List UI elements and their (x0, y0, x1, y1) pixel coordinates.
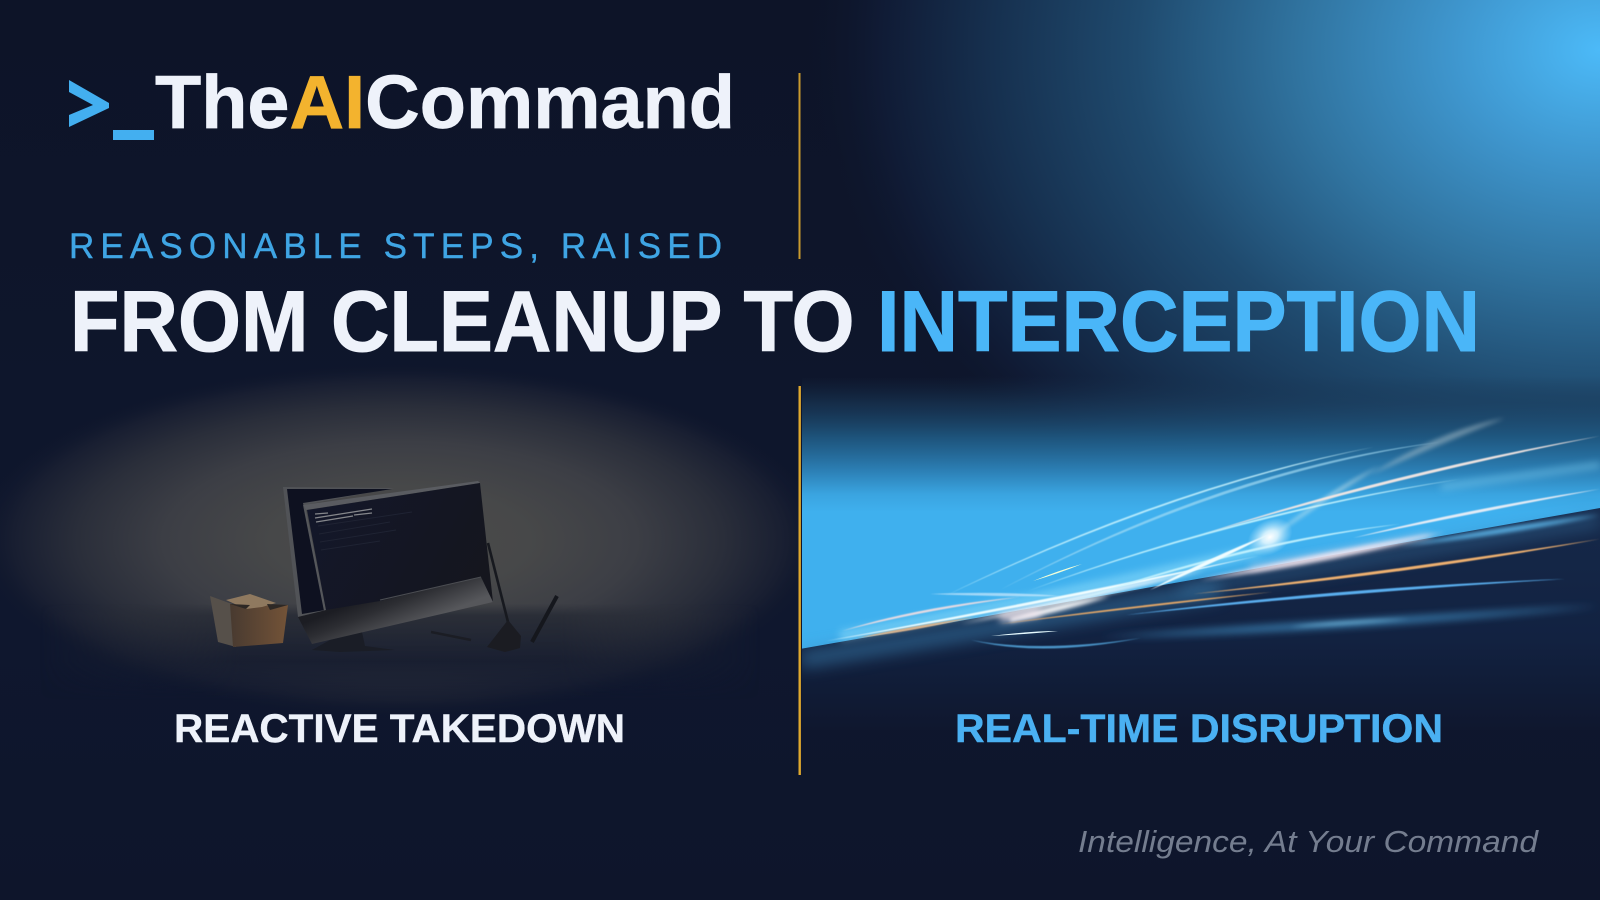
front monitor top bezel (303, 481, 480, 510)
rear monitor frame (283, 487, 394, 617)
monitor stand (312, 632, 395, 652)
crossing streak (1150, 534, 1270, 590)
wide pale streak along edge (1200, 532, 1445, 580)
panel: real-time disruption light streak (802, 386, 1600, 694)
main headline: FROM CLEANUP TO INTERCEPTION (70, 274, 1480, 370)
icon: paper waste bin (210, 594, 288, 647)
icon: terminal prompt (69, 80, 154, 140)
star flare (1248, 519, 1292, 555)
light streaks (826, 418, 1600, 649)
grey spotlight backdrop (0, 360, 800, 720)
sky blue field (802, 372, 1600, 660)
label: real-time disruption: REAL-TIME DISRUPTION (955, 707, 1443, 751)
top-right light glow (800, 0, 1600, 660)
soft blue glow under wedge edge (800, 590, 1220, 660)
logo (69, 60, 735, 144)
brand wordmark: TheAICommand (155, 60, 735, 144)
pale pink upper streak (1203, 436, 1600, 534)
orange streaks (1193, 539, 1600, 594)
screen text lines (315, 509, 372, 522)
blue streaks (1126, 579, 1565, 615)
divider: upper vertical rule (798, 73, 800, 259)
main white streak (826, 556, 1258, 641)
monitor chin (298, 577, 493, 644)
label: reactive takedown: REACTIVE TAKEDOWN (174, 707, 625, 751)
front monitor left bezel (303, 505, 326, 611)
eyebrow heading: REASONABLE STEPS, RAISED (69, 227, 722, 266)
icon: broom (487, 543, 521, 652)
divider: lower vertical rule (798, 386, 801, 775)
icon: desktop monitor (283, 481, 493, 652)
icon: pen on desk (532, 596, 557, 642)
tagline: Intelligence, At Your Command (1078, 824, 1540, 859)
front monitor screen (307, 483, 493, 610)
broad cyan haze around core (840, 550, 1260, 636)
desk surface (186, 608, 614, 682)
thin cyan streaks (945, 447, 1374, 596)
panel: reactive takedown scene (10, 378, 790, 702)
dark lower wedge (802, 508, 1600, 694)
icon: fallen stick (431, 632, 471, 640)
